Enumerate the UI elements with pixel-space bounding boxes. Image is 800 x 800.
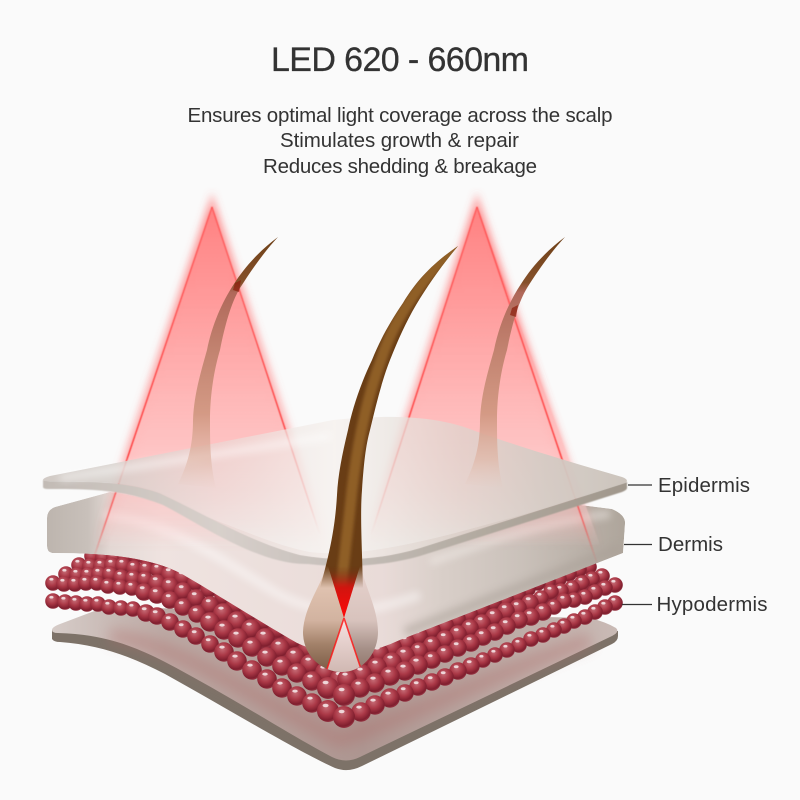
benefits text block: Ensures optimal light coverage across the scalp [188, 104, 612, 127]
small hair left [178, 237, 278, 488]
label: dermis [624, 533, 723, 556]
label: dermis: Dermis [658, 533, 723, 556]
bottom plate [52, 607, 618, 770]
red light beam right [368, 207, 600, 563]
dermis layer [47, 492, 625, 654]
epidermis layer [43, 417, 627, 566]
benefits text block [188, 104, 612, 178]
hypodermis beads [45, 548, 623, 728]
label: hypodermis: Hypodermis [656, 593, 768, 616]
small hair right [465, 237, 565, 488]
main hair [320, 246, 458, 587]
hair bulb follicle [303, 567, 378, 672]
skin layers illustration [43, 207, 627, 770]
title: LED 620 - 660nm [271, 41, 529, 79]
label: epidermis: Epidermis [658, 474, 750, 497]
red light beam left [93, 207, 325, 560]
benefits text block: Reduces shedding & breakage [263, 155, 537, 178]
benefits text block: Stimulates growth & repair [280, 129, 519, 152]
